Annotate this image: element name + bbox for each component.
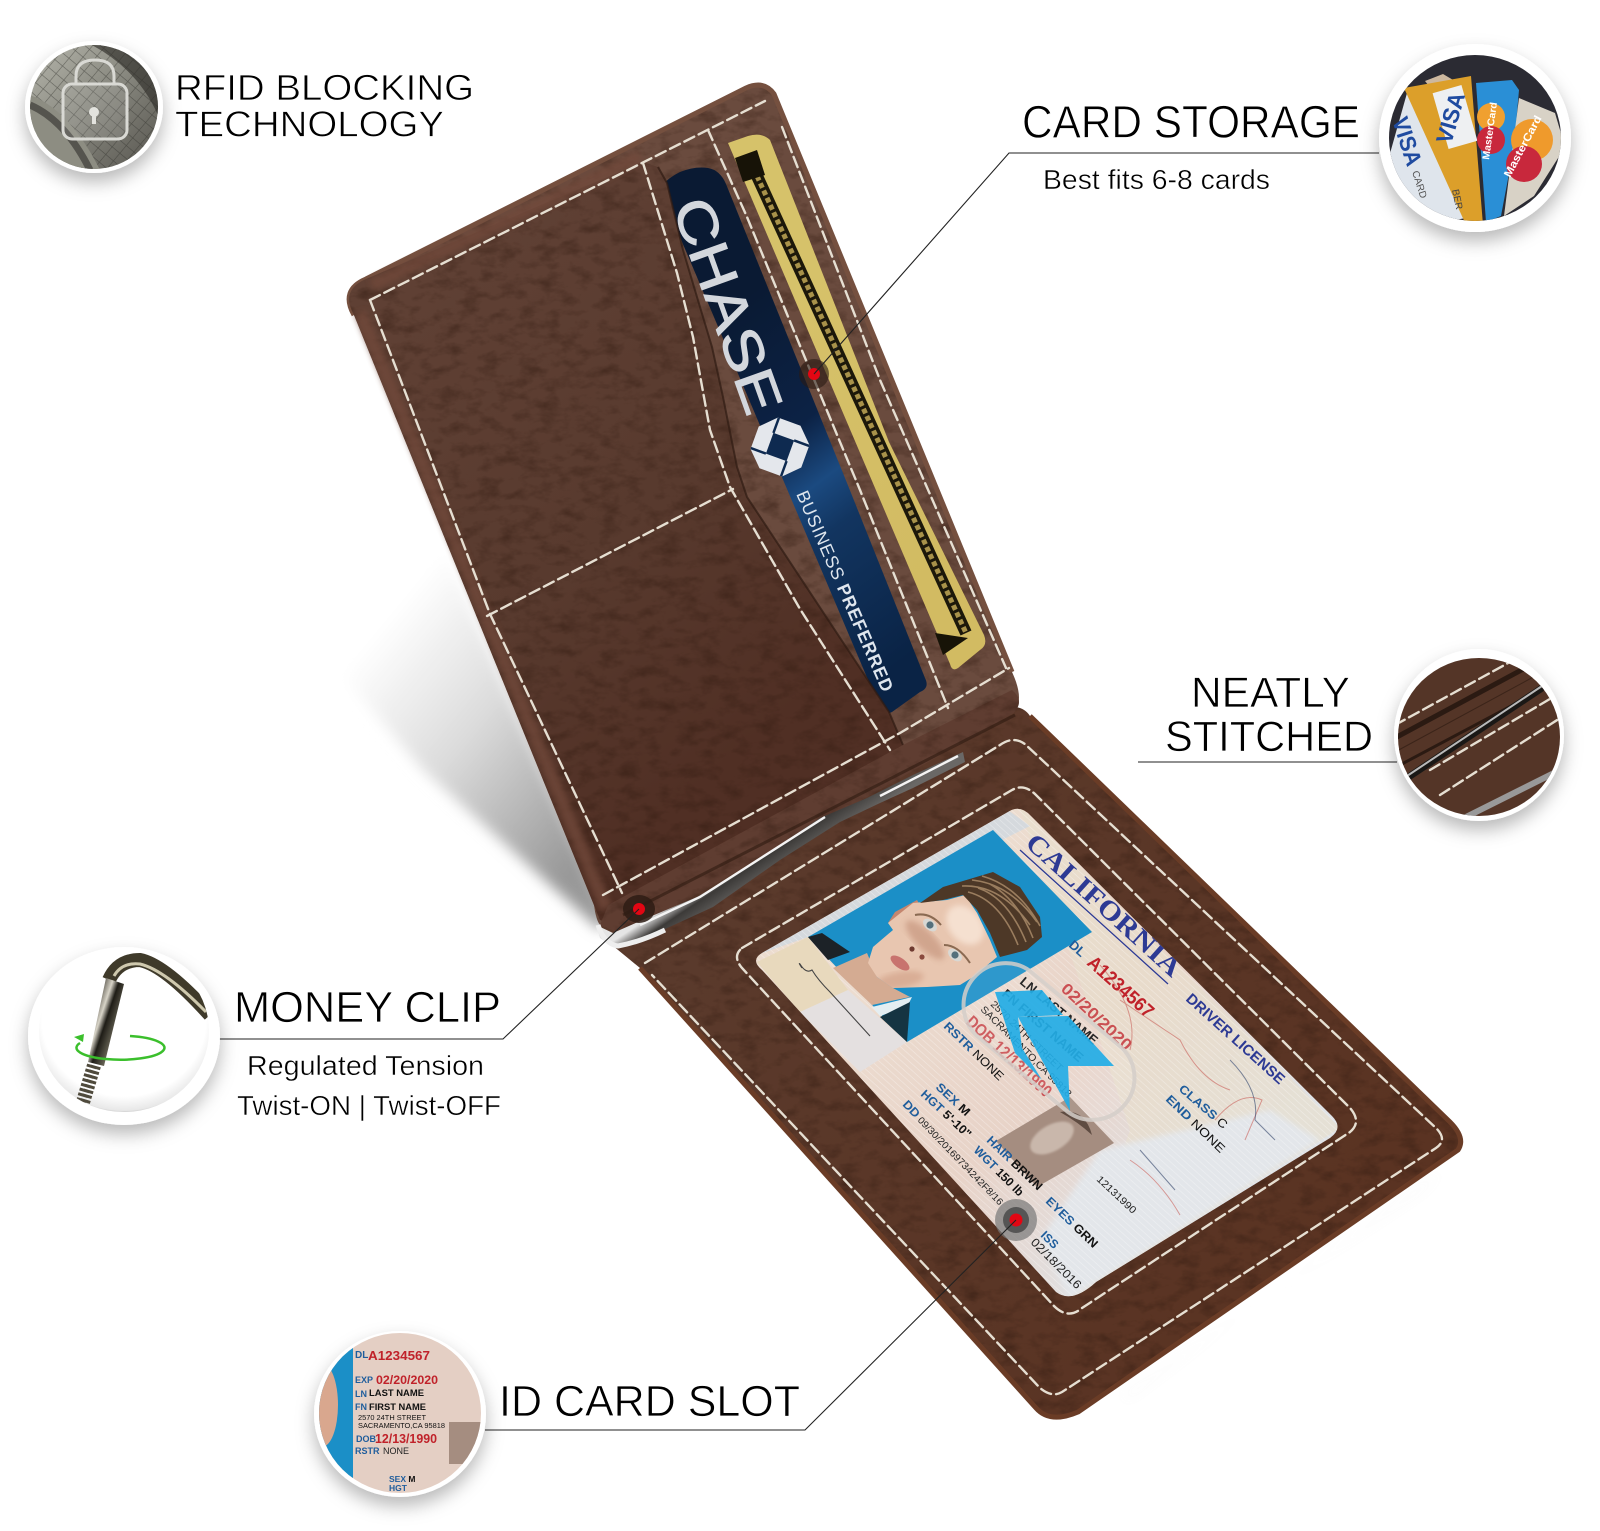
- icon: ID card close-up: SACRAMENTO,CA 95818: [358, 1423, 445, 1430]
- wallet: [349, 85, 1461, 1417]
- ID text: LN LAST NAME: [1017, 974, 1101, 1048]
- ID text: 12131990: [1094, 1174, 1138, 1217]
- hinge fold: [600, 690, 1019, 935]
- callout: money clip: [28, 909, 639, 1125]
- ID card in window: [756, 808, 1338, 1296]
- icon: ID card close-up: NONE: [383, 1446, 409, 1456]
- photo background: [808, 830, 1092, 1042]
- Chase card: [660, 168, 927, 713]
- outer stitching: [645, 740, 1442, 1394]
- ID text: FN FIRST NAME: [999, 986, 1087, 1065]
- pocket edge highlight: [360, 156, 640, 908]
- map lines: [1100, 965, 1262, 1215]
- marker: card storage: [799, 359, 829, 389]
- icon: ID card close-up: 12/13/1990: [375, 1431, 437, 1446]
- ID text: END NONE: [1163, 1092, 1228, 1156]
- icon: RFID lock fabric: [25, 41, 163, 173]
- marker: money clip: [623, 895, 655, 923]
- icon: ID card close-up: EXP: [355, 1375, 373, 1385]
- heading: STITCHED: [1165, 713, 1373, 761]
- window stitching: [737, 787, 1356, 1314]
- ID text: 02/18/2016: [1028, 1235, 1085, 1292]
- ID text: ISS: [1038, 1228, 1062, 1252]
- heading: [1165, 669, 1373, 761]
- icon: ID card close-up: LAST NAME: [369, 1388, 424, 1399]
- panel: card pocket side of wallet: [349, 85, 1019, 935]
- description: Twist-ON | Twist-OFF: [237, 1090, 501, 1121]
- ID text: EYES GRN: [1043, 1194, 1101, 1251]
- icon: ID card close-up: [306, 1330, 486, 1500]
- ID text: RSTR NONE: [941, 1019, 1007, 1083]
- icon: stitched leather close-up: [1390, 649, 1570, 825]
- hinge groove: [623, 715, 1015, 915]
- ID text: CLASS C: [1176, 1082, 1231, 1132]
- heading: TECHNOLOGY: [175, 104, 444, 144]
- gold card: [728, 135, 985, 669]
- leader line: [1138, 761, 1397, 763]
- icon: ID card close-up: LN: [355, 1389, 367, 1399]
- ID text: A1234567: [1083, 952, 1158, 1023]
- icon: ID card close-up: 2570 24TH STREET: [358, 1415, 427, 1422]
- callout: neatly stitched: [1138, 649, 1570, 825]
- stitching: [370, 101, 1009, 895]
- icon: fanned credit cards: VISA: [1431, 89, 1470, 146]
- heading: NEATLY: [1191, 669, 1350, 717]
- icon: fanned credit cards: BER: [1449, 188, 1464, 211]
- ID text: DD 09/30/20169734242F8/16: [900, 1097, 1007, 1208]
- leader line: [814, 153, 1379, 374]
- ID text: WGT 150 lb: [971, 1143, 1027, 1199]
- icon: fanned credit cards: VISA: [1387, 114, 1427, 169]
- icon: ID card close-up: SEX M: [389, 1474, 415, 1484]
- ID text: 2570 24TH STREET: [988, 999, 1065, 1074]
- money clip bar: [596, 752, 965, 947]
- ghost photo: [996, 1097, 1114, 1187]
- icon: ID card close-up: A1234567: [368, 1348, 430, 1363]
- leader line: [485, 1220, 1016, 1430]
- heading: ID CARD SLOT: [499, 1377, 800, 1426]
- wallet shadow: [300, 540, 1445, 1400]
- ID text: DOB 12/13/1990: [962, 1012, 1056, 1101]
- icon: ID card close-up: 02/20/2020: [376, 1373, 438, 1387]
- icon: fanned credit cards: MasterCard: [1481, 101, 1500, 160]
- icon: fanned credit cards: MasterCard: [1502, 114, 1545, 179]
- callout: card storage: [814, 44, 1571, 374]
- front pocket: [349, 162, 903, 930]
- Chase logo: [745, 412, 815, 482]
- icon: fanned credit cards: CARD: [1409, 170, 1428, 200]
- watermark ring and chevrons: [964, 963, 1134, 1120]
- state heading: CALIFORNIA: [1020, 827, 1188, 983]
- Chase card: BUSINESS PREFERRED: [792, 488, 898, 696]
- ID text: DL: [1066, 937, 1089, 960]
- ID text: DRIVER LICENSE: [1182, 990, 1288, 1088]
- leader line: [219, 909, 639, 1039]
- heading: CARD STORAGE: [1022, 96, 1360, 148]
- description: Best fits 6-8 cards: [1043, 164, 1270, 195]
- panel: ID window side of wallet: [599, 707, 1461, 1417]
- marker: ID card slot: [995, 1199, 1037, 1241]
- description: [237, 1050, 501, 1121]
- callout: ID card slot: [306, 1220, 1016, 1500]
- heading: [175, 67, 474, 144]
- Chase card: CHASE: [661, 189, 795, 422]
- signature strip: [757, 937, 848, 1012]
- ID text: HGT 5'-10": [918, 1087, 974, 1141]
- ID text: HAIR BRWN: [984, 1133, 1045, 1193]
- portrait: [808, 872, 1042, 1042]
- icon: ID card close-up: FN: [355, 1402, 367, 1412]
- icon: ID card close-up: HGT: [389, 1483, 408, 1493]
- icon: ID card close-up: DL: [355, 1350, 368, 1361]
- ID text: [900, 937, 1288, 1292]
- icon: clip screw with twist arrow: [28, 947, 220, 1125]
- heading: RFID BLOCKING: [175, 67, 474, 108]
- description: Regulated Tension: [247, 1050, 484, 1081]
- heading: MONEY CLIP: [234, 983, 501, 1032]
- icon: ID card close-up: RSTR: [355, 1446, 380, 1456]
- ID text: 02/20/2020: [1057, 980, 1135, 1054]
- ID text: SACRAMENTO,CA 95818: [978, 1004, 1074, 1100]
- icon: fanned credit cards: [1379, 44, 1571, 232]
- icon: ID card close-up: FIRST NAME: [369, 1402, 426, 1413]
- icon: ID card close-up: DOB: [356, 1434, 376, 1444]
- ID text: SEX M: [933, 1080, 973, 1119]
- callout: RFID blocking technology: [25, 41, 474, 173]
